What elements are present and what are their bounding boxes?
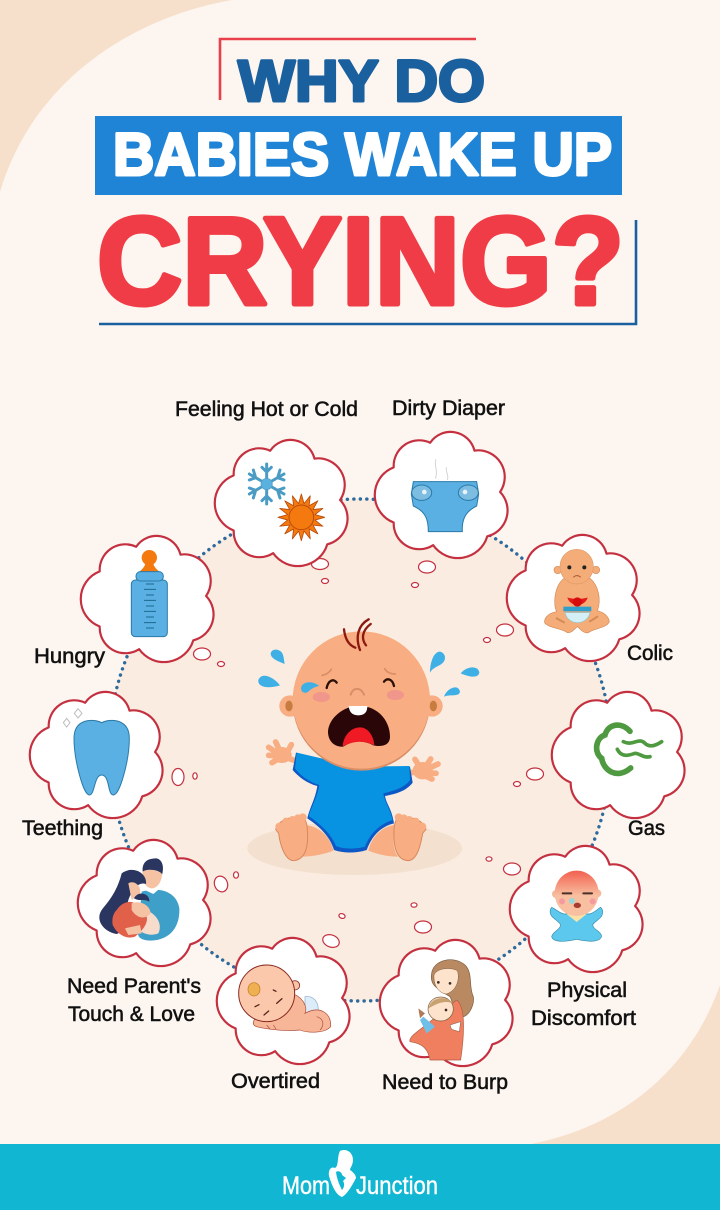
- labels: Physical: [547, 979, 627, 1002]
- ears: [279, 695, 301, 717]
- icon: sleeping baby: [239, 965, 331, 1032]
- blue onesie: [293, 753, 413, 852]
- cloud: colic: [507, 535, 640, 661]
- cloud: teething: [30, 692, 163, 818]
- cloud: parent's touch and love: [78, 840, 211, 966]
- labels: Colic: [627, 642, 673, 665]
- title: [95, 39, 636, 331]
- icon: snowflake and sun: [249, 464, 325, 541]
- labels: Overtired: [231, 1070, 320, 1093]
- crying baby: [247, 619, 479, 875]
- labels: Dirty Diaper: [392, 397, 505, 420]
- right hand: [407, 759, 438, 779]
- left foot: [275, 813, 308, 861]
- icon: baby with tummy ache: [545, 549, 609, 633]
- icon: baby bottle: [131, 550, 167, 637]
- labels: Hungry: [34, 645, 106, 668]
- title line: crying: CRYING?: [97, 193, 624, 331]
- mouth: [328, 706, 390, 747]
- tears: [258, 650, 479, 697]
- logo icon cutout: baby: [336, 1171, 346, 1190]
- logo text: Junction: [356, 1172, 438, 1200]
- dotted ring: [109, 499, 611, 1001]
- icon: parents holding baby: [99, 858, 179, 941]
- footer: [0, 1144, 720, 1210]
- head shadow: [293, 633, 430, 771]
- eyes and brows: [322, 669, 395, 695]
- logo text: [282, 1172, 438, 1200]
- cheeks: [313, 692, 330, 702]
- tongue: [343, 727, 374, 747]
- background corner: bottom right: [520, 985, 720, 1146]
- tooth: [349, 706, 367, 715]
- cloud: feeling hot or cold: [215, 440, 348, 566]
- logo text: Mom: [282, 1172, 330, 1200]
- title banner: [95, 116, 622, 195]
- left hand: [269, 742, 298, 763]
- labels: Discomfort: [531, 1007, 636, 1030]
- labels: Need to Burp: [382, 1071, 508, 1094]
- title line: why do: WHY DO: [238, 49, 485, 114]
- legs: [302, 825, 398, 857]
- hair: [344, 619, 371, 650]
- icon: tooth: [63, 709, 129, 795]
- cloud: need to burp: [380, 940, 513, 1066]
- labels: Gas: [628, 817, 665, 840]
- icon: sick baby: [550, 871, 603, 941]
- labels: [22, 397, 673, 1094]
- labels: Need Parent's: [67, 975, 201, 998]
- head: [293, 631, 430, 769]
- labels: Touch & Love: [68, 1003, 195, 1026]
- logo icon: mother and child: [329, 1150, 356, 1197]
- labels: Teething: [22, 817, 103, 840]
- title frame: red corner: [220, 39, 476, 100]
- background corner: top left: [0, 0, 232, 192]
- cloud: gas: [552, 692, 685, 818]
- cloud: hungry: [81, 536, 214, 662]
- cloud: physical discomfort: [510, 846, 643, 972]
- central peach circle: [109, 499, 611, 1001]
- right foot: [394, 813, 426, 861]
- cloud: overtired: [217, 938, 350, 1064]
- icon: gas cloud: [597, 725, 662, 773]
- thought bubbles: [172, 558, 544, 950]
- title frame: blue corner: [99, 220, 636, 324]
- labels: Feeling Hot or Cold: [175, 398, 358, 421]
- icon: mother burping baby: [410, 960, 474, 1060]
- floor shadow: [247, 822, 462, 875]
- icon: diaper: [411, 459, 479, 532]
- title line: babies wake up: BABIES WAKE UP: [113, 121, 612, 188]
- cloud: dirty diaper: [375, 432, 508, 558]
- logo: [282, 1150, 438, 1200]
